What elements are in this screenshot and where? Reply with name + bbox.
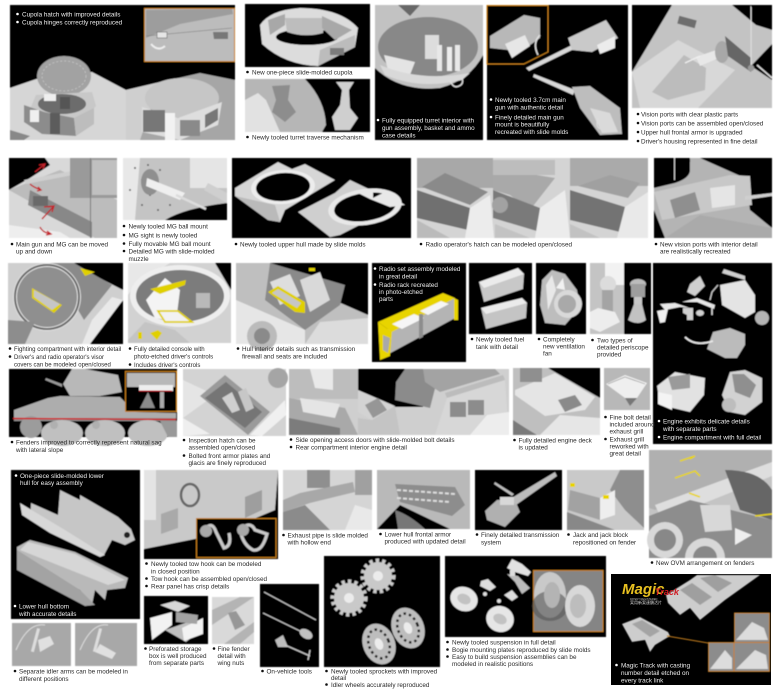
text: main gun: Newly tooled 3.7cm main [495, 97, 566, 104]
caption: MG ball mount: Detailed MG with slide-molded [128, 248, 215, 255]
caption: idler arms [14, 668, 128, 683]
caption: MG ball mount: MG sight is newly tooled [128, 232, 198, 239]
gun with mount, upper [526, 20, 618, 71]
track links [622, 575, 760, 652]
idler wheels [356, 603, 431, 669]
panel: driver's console [128, 263, 231, 343]
caption: vision ports interior: are realistically recreated [660, 248, 731, 255]
caption: transmission [476, 532, 560, 546]
caption: upper hull: Newly tooled upper hull made by slide molds [240, 241, 366, 248]
panel: radio set [372, 263, 466, 362]
text: lower hull bottom: Lower hull bottom [19, 603, 69, 610]
text: engine: with separate parts [662, 426, 717, 433]
caption: vision ports: Driver's housing represented in fine detail [641, 138, 758, 145]
text: turret interior: case details [382, 132, 416, 139]
caption: tow hook: Tow hook can be assembled open/closed [151, 576, 267, 583]
caption: exhaust grill [604, 414, 655, 457]
caption: periscope: Two types of [597, 337, 633, 344]
panel: idler arms [12, 623, 137, 666]
caption: fuel tank: tank with detail [476, 344, 518, 351]
caption: periscope: provided [597, 351, 622, 358]
text: main gun: Finely detailed main gun [495, 114, 564, 121]
panel: cupola hatch [10, 5, 235, 140]
caption: tow hook: Rear panel has crisp details [151, 583, 229, 590]
caption: exhaust grill: great detail [610, 450, 641, 457]
text: radio set: parts [379, 296, 393, 303]
text: turret interior [377, 117, 475, 139]
caption: driver's console: Fully detailed console with [134, 347, 205, 353]
caption: jack: Jack and jack block [573, 532, 629, 539]
panel: hull interior [236, 263, 368, 351]
open hatch turret view [10, 56, 126, 140]
caption: exhaust grill: Fine bolt detail [610, 414, 651, 421]
caption: one-piece cupola: New one-piece slide-molded cupola [252, 69, 353, 76]
caption: vision ports: Vision ports can be assembled open/closed [641, 120, 764, 127]
panel: radio operator's hatch [417, 158, 648, 238]
text: main gun [490, 97, 568, 136]
caption: fenders: Fenders improved to correctly represent natural sag [16, 439, 162, 446]
caption: vision ports interior: New vision ports with interior detail [660, 241, 758, 248]
text: turret interior: Fully equipped turret interior with [382, 117, 474, 124]
caption: sprockets: Idler wheels accurately reproduced [331, 682, 430, 689]
logo: Magic Track: PATENT REGISTERED [630, 597, 658, 601]
caption: engine deck [513, 437, 593, 451]
inset: fender close-up [126, 372, 176, 412]
caption: idler arms: Separate idler arms can be modeled in [19, 668, 128, 675]
caption: inspection hatch: Inspection hatch can be [188, 437, 256, 444]
text: engine: Engine compartment with full detail [663, 434, 761, 441]
panel: MG ball mount [123, 158, 227, 220]
panel: upper hull [232, 158, 411, 238]
caption: storage box: Preforated storage [149, 646, 202, 653]
inset: gun mount detail [487, 6, 548, 64]
panel: main gun [487, 5, 628, 140]
caption: fuel tank [471, 336, 524, 351]
caption: sprockets [325, 668, 438, 689]
panel: fender sag [9, 369, 177, 446]
closed hatch turret view [126, 73, 235, 140]
panel: storage box [144, 596, 208, 644]
lower hull part, lower [17, 540, 128, 606]
caption: fighting compartment: Fighting compartment with interior detail [14, 347, 121, 353]
panel: sprockets and idlers [324, 556, 440, 669]
panel: one-piece cupola [245, 4, 370, 67]
caption: driver's console: photo-etched driver's controls [134, 354, 213, 360]
panel: fender detail [212, 597, 254, 644]
caption: suspension: Newly tooled suspension in full detail [452, 639, 556, 646]
text: cupola hatch bullets [16, 11, 123, 26]
text: cupola hatch bullets: Cupola hatch with improved details [22, 11, 120, 18]
text: Magic Track: number detail etched on [621, 670, 690, 677]
caption: frontal armor [379, 531, 466, 545]
caption: suspension: Easy to build suspension assemblies can be [452, 654, 577, 661]
caption: fenders: with lateral slope [15, 447, 64, 454]
text: radio set: Radio rack recreated [379, 282, 438, 289]
caption: engine deck: is updated [518, 444, 548, 451]
caption: MG ball mount: muzzle [128, 256, 149, 263]
caption: main gun and MG: Main gun and MG can be moved [16, 241, 109, 248]
caption: MG ball mount [123, 223, 215, 263]
caption: ventilation fan: Completely [543, 336, 576, 343]
panel: exhaust pipe [283, 470, 372, 530]
logo: Magic Track: 実用新案連鎖活片 [630, 599, 662, 605]
engine parts sprue [657, 269, 769, 325]
caption: MG ball mount: Fully movable MG ball mount [128, 241, 211, 248]
caption: hull interior: Hull interior details such as transmission [242, 346, 356, 353]
caption: inspection hatch: glacis are finely reproduced [188, 460, 267, 467]
arrows: red movement arrows [30, 164, 54, 235]
lower hull part, upper [20, 490, 135, 557]
caption: hull interior: firewall and seats are included [242, 353, 328, 360]
bogie wheels and parts [446, 559, 531, 637]
logo: Magic Track [622, 581, 680, 605]
text: main gun: gun with authentic detail [495, 104, 563, 111]
caption: tow hook: in closed position [151, 568, 200, 575]
panel: periscope [590, 263, 651, 334]
logo: Magic Track: Magic [622, 581, 665, 598]
panel: fighting compartment [8, 263, 123, 344]
text: main gun: mount is beautifully [495, 121, 550, 128]
panel: side access doors [289, 369, 509, 435]
text: main gun: recreated with slide molds [495, 129, 568, 136]
caption: side access doors [290, 437, 455, 451]
caption: transmission: system [481, 539, 501, 546]
caption: OVM arrangement: New OVM arrangement on fenders [656, 560, 754, 567]
text: radio set: in photo-etched [379, 289, 423, 296]
caption: fender detail: detail with [218, 653, 246, 660]
caption: exhaust grill: exhaust grill [610, 428, 643, 435]
caption: exhaust pipe [282, 532, 368, 546]
panel: tow hook [144, 470, 278, 559]
panel: lower hull frontal armor [377, 470, 470, 529]
panel: engine [653, 263, 772, 444]
caption: sprockets: Newly tooled sprockets with improved [331, 668, 438, 675]
assembled engine, lower right [722, 370, 762, 415]
caption: exhaust grill: Exhaust grill [610, 436, 644, 443]
caption: fighting compartment: covers can be modeled open/closed [14, 362, 111, 368]
caption: storage box [144, 646, 207, 667]
caption: vision ports: Vision ports with clear plastic parts [641, 111, 738, 118]
caption: storage box: box is well produced [149, 653, 207, 660]
sprockets [334, 562, 392, 613]
caption: exhaust grill: reworked with [610, 443, 649, 450]
text: lower hull top [15, 473, 104, 487]
caption: jack [567, 532, 636, 546]
caption: inspection hatch: assembled open/closed [188, 444, 256, 451]
caption: vision ports interior [655, 241, 758, 255]
caption: tow hook [145, 561, 267, 590]
caption: frontal armor: produced with updated detail [384, 538, 466, 545]
panel: fuel tank [469, 263, 532, 334]
caption: sprockets: detail [331, 675, 346, 682]
inset: wheel close-up [532, 570, 603, 632]
caption: driver's console: Includes driver's controls [134, 363, 200, 369]
red reference line [13, 418, 176, 420]
panel: lower hull [11, 470, 140, 619]
panel: turret interior [375, 5, 483, 140]
caption: turret traverse: Newly tooled turret traverse mechanism [252, 134, 364, 141]
text: cupola hatch bullets: Cupola hinges correctly reproduced [22, 19, 123, 26]
text: engine [658, 418, 761, 441]
panel: vision ports [632, 5, 772, 108]
caption: driver's console [129, 347, 213, 369]
panel: transmission [475, 470, 562, 530]
panel: main gun and MG movement [9, 158, 117, 238]
caption: idler arms: different positions [19, 676, 69, 683]
caption: fighting compartment [9, 347, 121, 368]
caption: tools: On-vehicle tools [266, 668, 312, 675]
tank side view [14, 369, 177, 446]
caption: transmission: Finely detailed transmission [481, 532, 560, 539]
panel: Magic Track [611, 574, 771, 685]
panel: exhaust grill [604, 368, 650, 410]
text: engine: Engine exhibits delicate details [663, 418, 750, 425]
inset: tow hooks [196, 518, 276, 558]
text: lower hull top: hull for easy assembly [20, 480, 84, 487]
inset: hinge detail [144, 8, 234, 62]
panel: jack and block [567, 470, 644, 530]
hatch half open [492, 160, 570, 238]
caption: exhaust grill: included around [610, 421, 655, 428]
text: turret interior: gun assembly, basket and ammo [382, 125, 475, 132]
caption: periscope [591, 337, 649, 358]
caption: suspension: Bogie mounting plates reproduced by slide molds [452, 647, 591, 654]
door view, right [358, 369, 509, 435]
caption: main gun and MG [11, 241, 109, 255]
caption: tow hook: Newly tooled tow hook can be modeled [151, 561, 262, 568]
caption: vision ports: Upper hull frontal armor is upgraded [641, 129, 743, 136]
caption: exhaust pipe: with hollow end [286, 539, 331, 546]
caption: radio hatch: Radio operator's hatch can be modeled open/closed [426, 241, 572, 248]
text: lower hull top: One-piece slide-molded lower [20, 473, 104, 480]
caption: engine deck: Fully detailed engine deck [518, 437, 593, 444]
caption: frontal armor: Lower hull frontal armor [384, 531, 451, 538]
assembled engine, lower left [657, 372, 705, 412]
text: radio set [374, 266, 461, 303]
caption: fender detail: Fine fender [218, 646, 250, 653]
door view, left [289, 369, 358, 435]
caption: ventilation fan: new ventilation [543, 343, 585, 350]
text: Magic Track: every track link [621, 677, 664, 684]
caption: MG ball mount: Newly tooled MG ball mount [128, 223, 208, 230]
gun with mount, lower [533, 74, 622, 135]
hatch closed [417, 158, 494, 238]
caption: side access doors: Side opening access doors with slide-molded bolt details [296, 437, 455, 444]
panel: inspection hatch [183, 368, 288, 436]
caption: ventilation fan [538, 336, 585, 357]
callout: track link insets [667, 613, 770, 672]
caption: inspection hatch [183, 437, 271, 467]
panel: OVM arrangement [647, 450, 772, 558]
text: lower hull bottom: with accurate details [18, 611, 76, 618]
assembled engine, upper [685, 328, 745, 358]
caption: suspension: modeled in realistic positions [452, 661, 533, 668]
panel: on-vehicle tools [260, 584, 319, 667]
caption: storage box: from separate parts [149, 660, 204, 667]
panel: suspension [445, 556, 606, 637]
caption: main gun and MG: up and down [16, 248, 53, 255]
caption: hull interior [237, 346, 356, 360]
text: radio set: Radio set assembly modeled [379, 266, 461, 273]
caption: fuel tank: Newly tooled fuel [476, 336, 524, 343]
caption: periscope: detailed periscope [597, 344, 649, 351]
radio rack, yellow photo-etch [378, 293, 458, 360]
caption: fenders [11, 439, 162, 454]
caption: fender detail: wing nuts [216, 660, 244, 667]
text: lower hull bottom [14, 603, 76, 618]
text: Magic Track: Magic Track with casting [621, 662, 691, 669]
caption: fender detail [213, 646, 250, 667]
caption: ventilation fan: fan [543, 350, 552, 357]
caption: suspension [446, 639, 591, 668]
panel: new vision ports [654, 158, 772, 238]
text: Magic Track [615, 662, 691, 684]
panel: turret traverse mechanism [245, 79, 370, 132]
caption: vision ports [637, 111, 764, 145]
caption: jack: repositioned on fender [573, 539, 636, 546]
logo: Magic Track: Track [655, 587, 680, 597]
caption: side access doors: Rear compartment interior engine detail [296, 444, 407, 451]
panel: ventilation fan [536, 263, 586, 334]
hatch open [570, 158, 648, 238]
text: radio set: in great detail [379, 273, 417, 280]
caption: inspection hatch: Bolted front armor plates and [188, 453, 271, 460]
panel: engine deck [513, 368, 600, 435]
caption: exhaust pipe: Exhaust pipe is slide molded [288, 532, 368, 539]
caption: fighting compartment: Driver's and radio operator's visor [14, 355, 104, 361]
